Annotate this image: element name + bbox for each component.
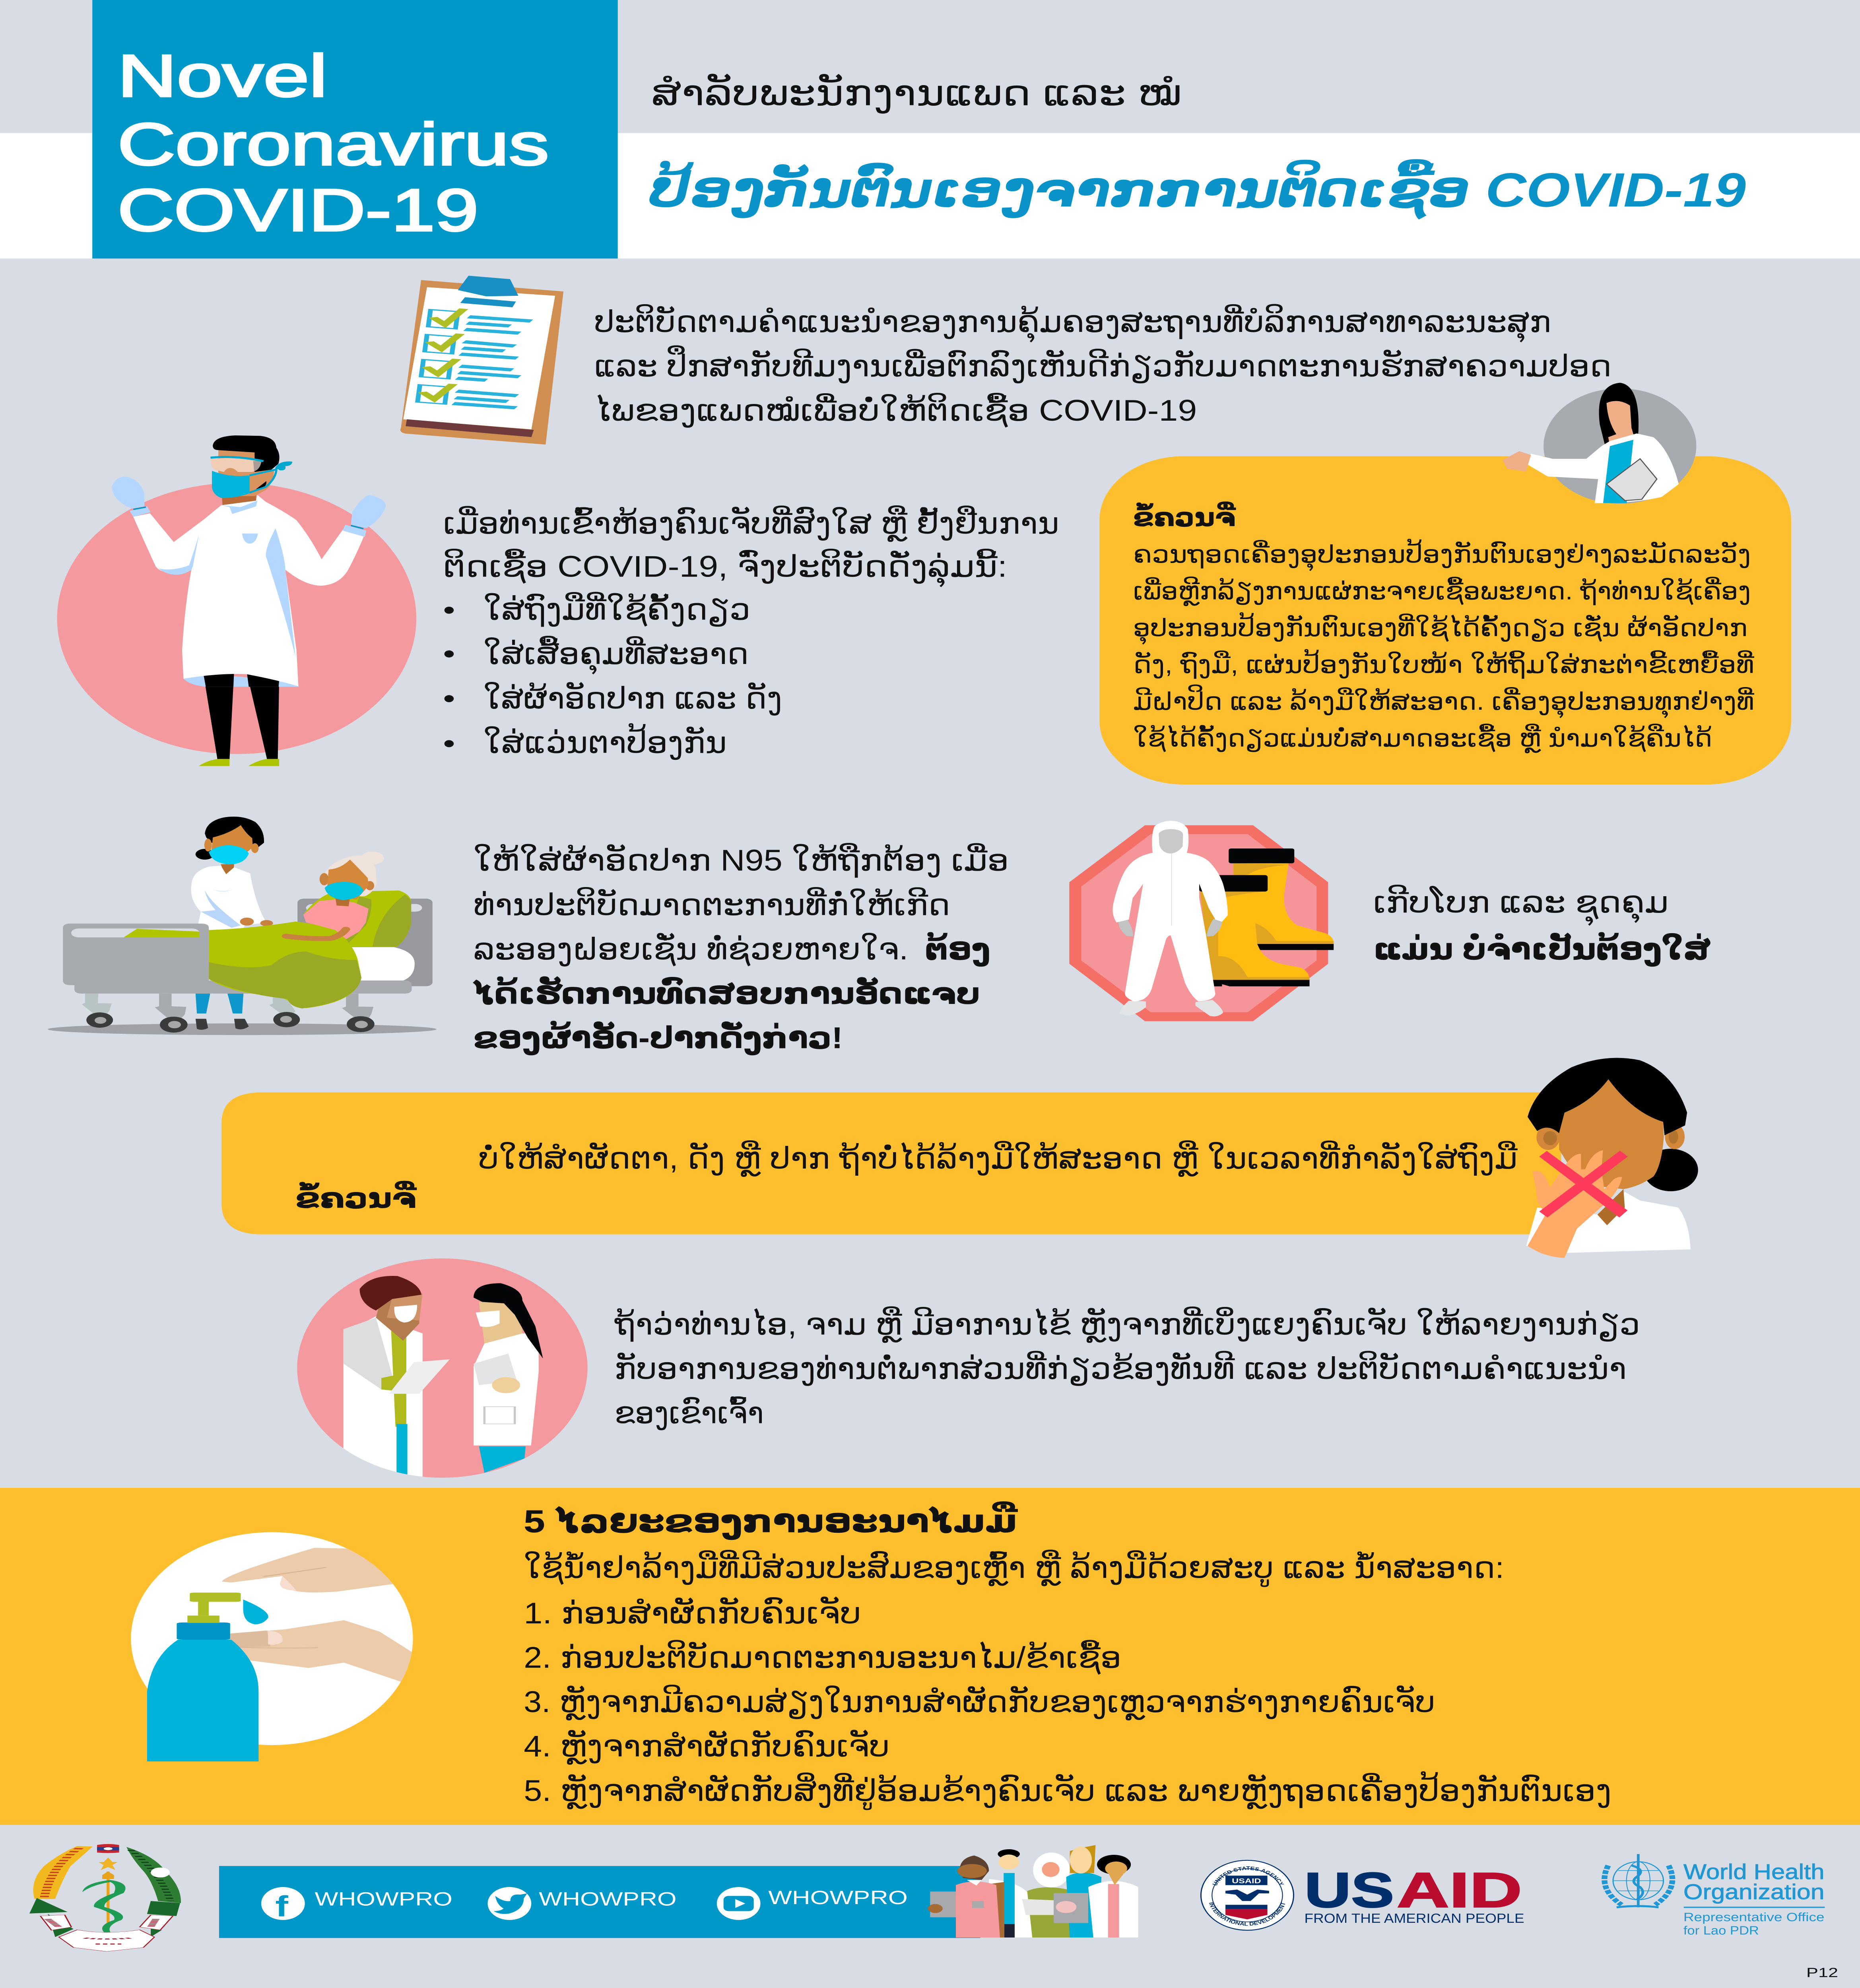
- WHO wordmark: World Health: [1683, 1860, 1824, 1884]
- USAID seal: INTERNATIONAL DEVELOPMENT: [1207, 1902, 1287, 1927]
- callout text: ໃຊ້ໄດ້ຄັ້ງດຽວແມ່ນບໍ່ສາມາດອະເຊື້ອ ຫຼື ນຳມາໃຊ້ຄືນໄດ້: [1133, 723, 1712, 753]
- logo: USAID: [1201, 1860, 1524, 1930]
- WHO wordmark: for Lao PDR: [1683, 1923, 1759, 1937]
- heading: five moments: 5 ໄລຍະຂອງການອະນາໄມມື: [524, 1501, 1018, 1540]
- text: N95 mask instruction: ໄດ້ເຮັດການທົດສອບການອັດແຈບ: [473, 976, 980, 1010]
- text: N95 mask instruction: ຂອງຜ້າອັດ-ປາກດັ່ງກ່າວ!: [474, 1021, 843, 1055]
- youtube handle: WHOWPRO: [768, 1887, 908, 1908]
- icon: doctor with clipboard in grey circle: [1503, 383, 1696, 504]
- list of hand hygiene steps: 2. ກ່ອນປະຕິບັດມາດຕະການອະນາໄມ/ຂ້າເຊື້ອ: [524, 1640, 1121, 1675]
- WHO wordmark: [1683, 1860, 1825, 1937]
- list of hand hygiene steps: ໃຊ້ນ້ຳຢາລ້າງມືທີ່ມີສ່ວນປະສົມຂອງເຫຼົ້າ ຫຼື ລ້າງມືດ້ວຍສະບູ ແລະ ນ້ຳສະອາດ:: [524, 1549, 1504, 1587]
- title block: Novel: [118, 43, 327, 109]
- subtitle: for health workers: ສຳລັບພະນັກງານແພດ ແລະ ໝໍ: [651, 73, 1182, 114]
- text: when entering patient room: ເມື່ອທ່ານເຂົ້າຫ້ອງຄົນເຈັບທີ່ສົງໃສ ຫຼື ຢັ້ງຢືນການ: [443, 505, 1059, 542]
- text: when entering patient room: [443, 505, 1059, 760]
- list of hand hygiene steps: 5. ຫຼັງຈາກສຳຜັດກັບສິ່ງທີ່ຢູ່ອ້ອມຂ້າງຄົນເຈັບ ແລະ ພາຍຫຼັງຖອດເຄື່ອງປ້ອງກັນຕົນເອງ: [524, 1771, 1611, 1810]
- text: N95 mask instruction: [473, 843, 1009, 1055]
- USAID seal: USAID: [1232, 1877, 1261, 1885]
- WHO wordmark: Organization: [1683, 1880, 1824, 1904]
- text: if you cough or sneeze: ຂອງເຂົາເຈົ້າ: [614, 1396, 764, 1430]
- text: when entering patient room: ຕິດເຊື້ອ COVID-19, ຈົ່ງປະຕິບັດດັ່ງລຸ່ມນີ້:: [443, 549, 1007, 587]
- reminder text: ບໍ່ໃຫ້ສຳຜັດຕາ, ດັງ ຫຼື ປາກ ຖ້າບໍ່ໄດ້ລ້າງມືໃຫ້ສະອາດ ຫຼື ໃນເວລາທີ່ກຳລັງໃສ່ຖົງມື: [478, 1140, 1518, 1176]
- social media bar: [219, 1866, 980, 1938]
- text: when entering patient room: ໃສ່ເສື້ອຄຸມທີ່ສະອາດ: [483, 636, 749, 675]
- bed rail: [63, 924, 209, 985]
- intro text: ແລະ ປຶກສາກັບທີມງານເພື່ອຕົກລົງເຫັນດີກ່ຽວກັບມາດຕະການຮັກສາຄວາມປອດ: [594, 345, 1611, 384]
- list of hand hygiene steps: 4. ຫຼັງຈາກສຳຜັດກັບຄົນເຈັບ: [524, 1730, 890, 1765]
- facebook handle: WHOWPRO: [315, 1888, 452, 1910]
- callout text: ຄວນຖອດເຄື່ອງອຸປະກອນປ້ອງກັນຕົນເອງຢ່າງລະມັດລະວັງ: [1133, 538, 1751, 571]
- panel: reminder callout: [1099, 456, 1791, 784]
- list of hand hygiene steps: 1. ກ່ອນສຳຜັດກັບຄົນເຈັບ: [524, 1596, 861, 1630]
- text: boots and coverall not required: [1373, 885, 1711, 967]
- illustration: two health workers in pink circle: [297, 1258, 588, 1481]
- title block: [92, 0, 618, 258]
- text: boots and coverall not required: ເກີບໂບກ ແລະ ຊຸດຄຸມ: [1373, 885, 1669, 926]
- text: when entering patient room: ໃສ່ຖົງມືທີ່ໃຊ້ຄັ້ງດຽວ: [483, 592, 750, 627]
- panel: five moments of hand hygiene: [0, 1488, 1860, 1825]
- illustration: doctor with mask and goggles: [112, 435, 386, 766]
- list of hand hygiene steps: [524, 1549, 1611, 1810]
- text: N95 mask instruction: ລະອອງຝອຍເຊັ່ນ ທໍ່ຊ່ວຍຫາຍໃຈ.: [474, 932, 908, 967]
- USAID seal: UNITED STATES AGENCY: [1212, 1866, 1285, 1887]
- icon: facebook: f: [275, 1890, 288, 1923]
- intro text: ປະຕິບັດຕາມຄຳແນະນຳຂອງການຄຸ້ມຄອງສະຖານທີ່ບໍລິການສາທາລະນະສຸກ: [594, 304, 1551, 343]
- intro text: [594, 304, 1611, 428]
- list of hand hygiene steps: 3. ຫຼັງຈາກມີຄວາມສ່ຽງໃນການສຳຜັດກັບຂອງເຫຼວຈາກຮ່າງກາຍຄົນເຈັບ: [524, 1684, 1435, 1720]
- USAID wordmark: AID: [1397, 1862, 1522, 1918]
- text: N95 mask instruction: ໃຫ້ໃສ່ຜ້າອັດປາກ N95 ໃຫ້ຖືກຕ້ອງ ເມື່ອ: [474, 843, 1009, 878]
- USAID seal: [1201, 1860, 1293, 1930]
- icon: hands and soap dispenser: [131, 1532, 427, 1761]
- text: if you cough or sneeze: [614, 1306, 1640, 1430]
- panel: do not touch reminder: [221, 1093, 1561, 1235]
- header white band: [0, 133, 1860, 258]
- blanket: [209, 922, 361, 1008]
- logo: Lao ministry of health emblem: [29, 1844, 181, 1951]
- illustration: nurse and patient in bed: [48, 817, 437, 1035]
- reminder label: ຂໍ້ຄວນຈື່: [295, 1181, 417, 1214]
- protective suit: [1113, 821, 1228, 1016]
- nurse: [191, 817, 273, 930]
- USAID tagline: FROM THE AMERICAN PEOPLE: [1305, 1911, 1524, 1926]
- illustration: woman covering face with X: [1526, 1058, 1698, 1258]
- icon: no coverall and boots octagon: [1069, 821, 1334, 1021]
- main heading: ປ້ອງກັນຕົນເອງຈາກການຕິດເຊື້ອ COVID-19: [647, 159, 1746, 220]
- USAID wordmark: US: [1305, 1862, 1394, 1918]
- callout text: ເພື່ອຫຼີກລ້ຽງການແຜ່ກະຈາຍເຊື້ອພະຍາດ. ຖ້າທ່ານໃຊ້ເຄື່ອງ: [1133, 576, 1751, 606]
- text: N95 mask instruction: ຕ້ອງ: [925, 932, 990, 967]
- title block: COVID-19: [118, 177, 478, 243]
- title block: Coronavirus: [118, 111, 549, 178]
- icon: facebook: [261, 1887, 305, 1923]
- text: when entering patient room: ໃສ່ຜ້າອັດປາກ ແລະ ດັງ: [483, 681, 782, 716]
- text: if you cough or sneeze: ກັບອາການຂອງທ່ານຕໍ່ພາກສ່ວນທີ່ກ່ຽວຂ້ອງທັນທີ ແລະ ປະຕິບັດຕາມຄຳແນະນຳ: [614, 1351, 1627, 1386]
- text: if you cough or sneeze: ຖ້າວ່າທ່ານໄອ, ຈາມ ຫຼື ມີອາການໄຂ້ ຫຼັງຈາກທີ່ເບິ່ງແຍງຄົນເຈັບ ໃຫ້ລາຍງານກ່ຽວ: [614, 1306, 1640, 1343]
- illustration: group of health workers: [928, 1845, 1138, 1938]
- twitter handle: WHOWPRO: [539, 1888, 676, 1910]
- boots: [1199, 848, 1334, 986]
- logo: World Health Organization: [1604, 1854, 1825, 1937]
- intro text: ໄພຂອງແພດໝໍເພື່ອບໍ່ໃຫ້ຕິດເຊື້ອ COVID-19: [594, 393, 1197, 428]
- callout text: ອຸປະກອນປ້ອງກັນຕົນເອງທີ່ໃຊ້ໄດ້ຄັ້ງດຽວ ເຊັ່ນ ຜ້າອັດປາກ: [1133, 612, 1747, 645]
- USAID wordmark: [1305, 1862, 1522, 1918]
- callout text: ມີຝາປິດ ແລະ ລ້າງມືໃຫ້ສະອາດ. ເຄື່ອງອຸປະກອນທຸກຢ່າງທີ່: [1133, 684, 1754, 718]
- icon: clipboard checklist: [400, 276, 563, 445]
- patient: [303, 852, 384, 939]
- callout text: [1133, 538, 1754, 753]
- icon: youtube: [717, 1887, 761, 1920]
- panel: doctor illustration: [57, 435, 416, 766]
- callout heading: ຂໍ້ຄວນຈື່: [1133, 501, 1236, 531]
- icon: twitter: [487, 1887, 531, 1920]
- text: when entering patient room: ໃສ່ແວ່ນຕາປ້ອງກັນ: [483, 723, 727, 760]
- WHO wordmark: Representative Office: [1683, 1910, 1824, 1924]
- page number: P12: [1806, 1965, 1838, 1980]
- text: boots and coverall not required: ແມ່ນ ບໍ່ຈຳເປັນຕ້ອງໃສ່: [1373, 932, 1711, 967]
- callout text: ດັງ, ຖົງມື, ແຜ່ນປ້ອງກັນໃບໜ້າ ໃຫ້ຖິ້ມໃສ່ກະຕ່າຂີ້ເຫຍື້ອທີ່: [1133, 649, 1754, 679]
- WHO emblem: [1604, 1854, 1672, 1907]
- text: N95 mask instruction: ທ່ານປະຕິບັດມາດຕະການທີ່ກໍ່ໃຫ້ເກີດ: [474, 887, 950, 922]
